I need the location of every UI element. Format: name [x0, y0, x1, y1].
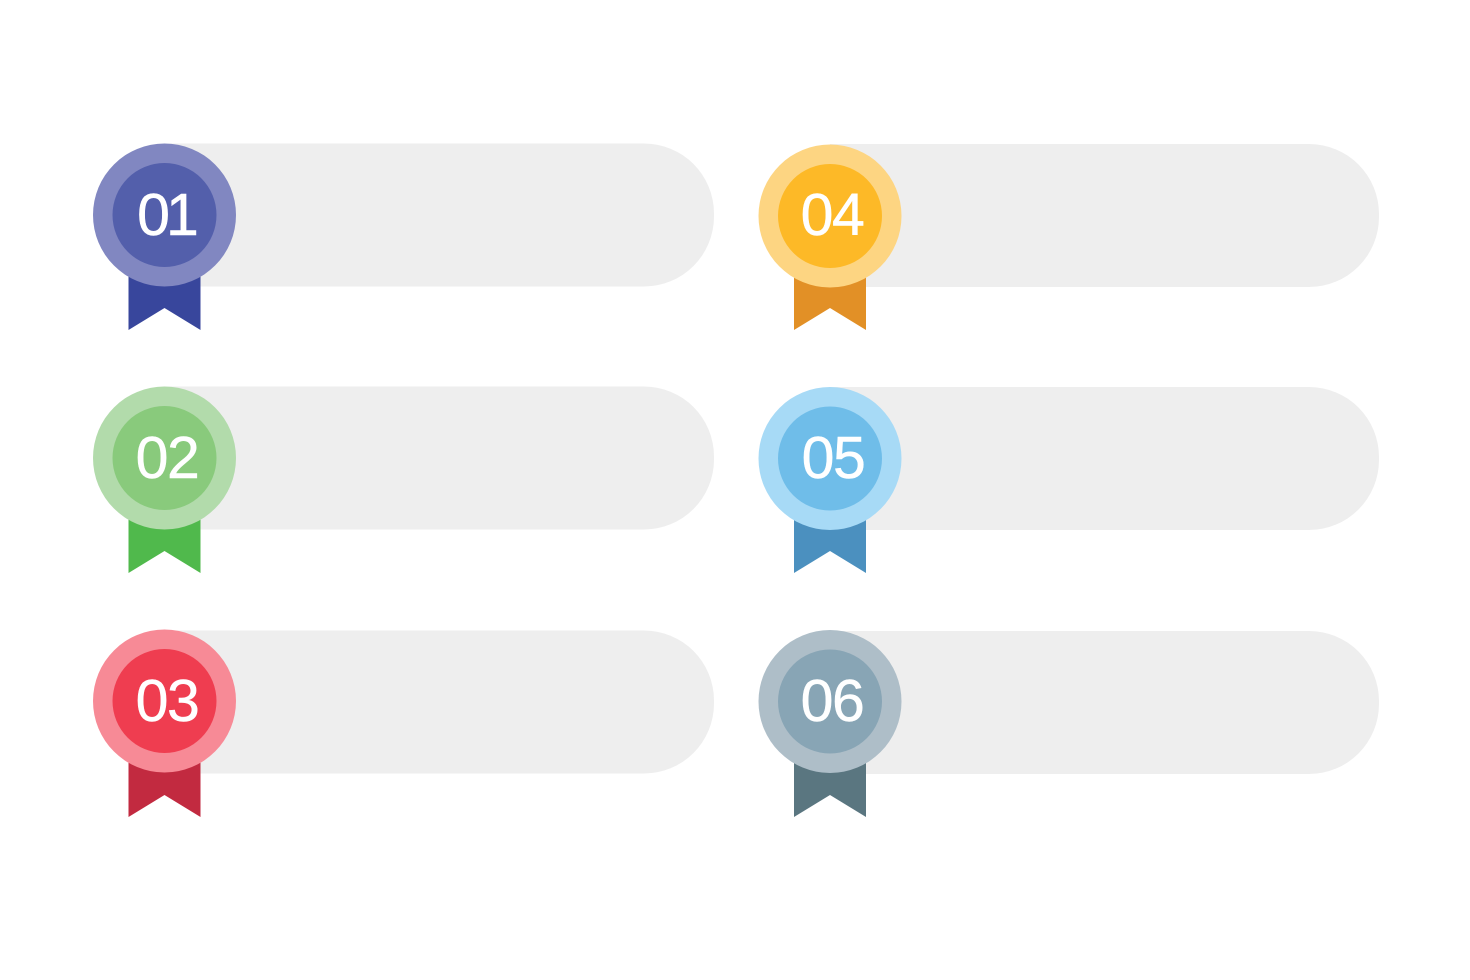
number 05: 05 [802, 425, 864, 491]
icon: medal inner circle 06 [778, 650, 882, 754]
icon: medal outer ring 06 [758, 630, 902, 773]
number 03: 03 [136, 668, 198, 734]
icon: medal inner circle 03 [112, 649, 216, 753]
icon: ribbon 05 [794, 509, 866, 573]
number 01: 01 [137, 182, 196, 248]
item 06 [758, 630, 1379, 817]
icon: medal outer ring 04 [758, 144, 902, 288]
item 03 [93, 630, 714, 817]
icon: medal inner circle 05 [778, 406, 882, 510]
icon: medal inner circle 04 [778, 164, 882, 268]
icon: ribbon 01 [128, 265, 200, 330]
icon: medal outer ring 03 [93, 630, 236, 772]
icon: medal inner circle 01 [112, 163, 216, 267]
item 02 [93, 386, 714, 573]
item 05 [758, 387, 1379, 573]
icon: ribbon 03 [128, 752, 200, 817]
panel: bar 04 [830, 144, 1379, 287]
panel: bar 05 [830, 387, 1379, 530]
icon: medal outer ring 05 [758, 387, 902, 530]
icon: medal inner circle 02 [112, 406, 216, 510]
panel: bar 03 [164, 630, 714, 774]
icon: medal outer ring 01 [93, 144, 236, 286]
panel: bar 06 [830, 631, 1379, 774]
panel: bar 02 [164, 386, 714, 530]
icon: ribbon 06 [794, 752, 866, 817]
number 02: 02 [136, 425, 198, 491]
number 04: 04 [801, 182, 864, 248]
item 01 [93, 144, 714, 330]
number 06: 06 [801, 668, 863, 734]
panel: bar 01 [164, 144, 714, 286]
item 04 [758, 144, 1379, 330]
icon: ribbon 04 [794, 266, 866, 330]
icon: ribbon 02 [128, 508, 200, 573]
icon: medal outer ring 02 [93, 386, 236, 530]
